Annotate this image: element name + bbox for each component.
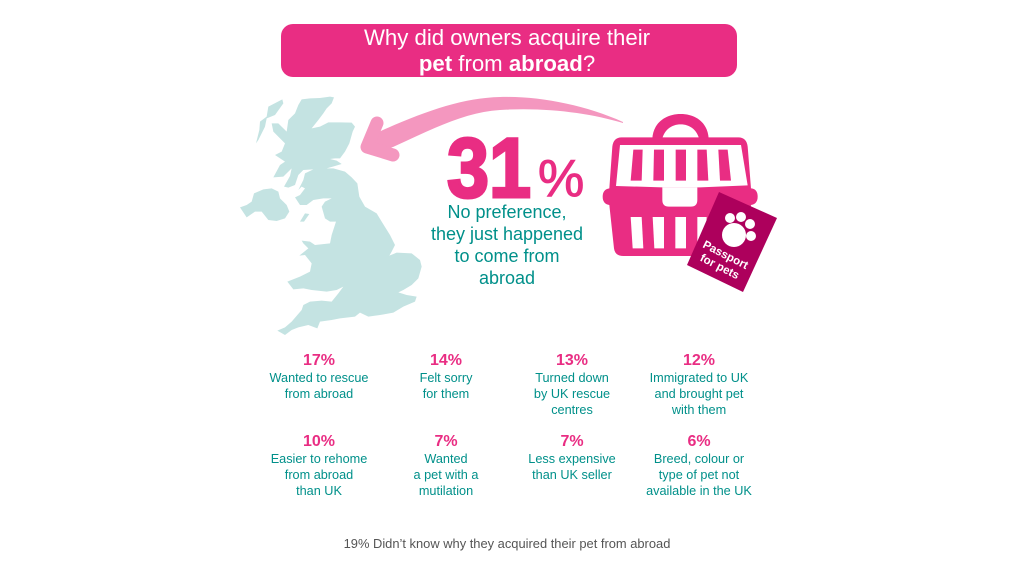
statistic: 14%: 14% — [430, 352, 462, 369]
main statement: No preference, — [447, 202, 567, 222]
statistic: 10%: than UK — [296, 484, 342, 498]
passport for pets — [687, 192, 777, 292]
big percentage 31%: 31 — [447, 121, 531, 215]
main statement — [431, 202, 583, 288]
statistic: 10%: Easier to rehome — [271, 452, 367, 466]
statistic: 7% wanted mutilation — [414, 433, 478, 498]
statistic: 6%: Breed, colour or — [654, 452, 744, 466]
statistic: 14%: for them — [423, 387, 469, 401]
statistic: 13% — [534, 352, 610, 417]
statistic: 10% — [271, 433, 367, 498]
statistic: 13%: Turned down — [535, 371, 609, 385]
statistic: 7% wanted mutilation: mutilation — [419, 484, 473, 498]
statistic: 7% wanted mutilation: Wanted — [424, 452, 468, 466]
statistic: 17%: from abroad — [285, 387, 353, 401]
statistic: 6%: 6% — [687, 433, 711, 450]
big percentage 31% — [447, 121, 584, 215]
main statement: they just happened — [431, 224, 583, 244]
statistic: 12%: 12% — [683, 352, 715, 369]
statistic: 14%: Felt sorry — [420, 371, 472, 385]
map of the UK — [240, 96, 422, 335]
statistic: 14% — [420, 352, 472, 401]
statistic: 13%: centres — [551, 403, 593, 417]
big percentage 31%: % — [538, 150, 584, 208]
statistic: 17% — [270, 352, 368, 401]
icon: paw print — [722, 212, 756, 247]
statistic: 6%: type of pet not — [659, 468, 739, 482]
title banner: pet from abroad? — [419, 51, 595, 76]
statistic: 10%: 10% — [303, 433, 335, 450]
statistic: 7% less expensive — [528, 433, 616, 482]
statistic: 12%: Immigrated to UK — [650, 371, 748, 385]
statistic: 17%: Wanted to rescue — [270, 371, 368, 385]
statistic: 17%: 17% — [303, 352, 335, 369]
statistic: 10%: from abroad — [285, 468, 353, 482]
statistic: 7% less expensive: than UK seller — [532, 468, 612, 482]
icon: pet carrier — [602, 114, 758, 256]
statistic: 7% less expensive: Less expensive — [528, 452, 616, 466]
passport label — [695, 239, 750, 284]
statistic: 13%: 13% — [556, 352, 588, 369]
statistic: 13%: by UK rescue — [534, 387, 610, 401]
statistic: 12%: and brought pet — [655, 387, 743, 401]
title banner: Why did owners acquire their — [364, 25, 650, 50]
passport cover — [687, 192, 777, 292]
footnote: 19% Didn’t know why they acquired their pet from abroad — [344, 536, 670, 551]
statistic: 7% wanted mutilation: a pet with a — [414, 468, 478, 482]
statistic: 12%: with them — [672, 403, 726, 417]
main statement: abroad — [479, 268, 535, 288]
statistic: 7% less expensive: 7% — [560, 433, 584, 450]
statistic: 7% wanted mutilation: 7% — [434, 433, 458, 450]
statistic: 6%: available in the UK — [646, 484, 752, 498]
statistic: 6% — [646, 433, 752, 498]
curved arrow to the UK — [360, 96, 623, 162]
statistic: 12% — [650, 352, 748, 417]
main statement: to come from — [454, 246, 560, 266]
passport label: for pets — [698, 252, 741, 282]
title banner — [281, 24, 737, 77]
passport label: Passport — [701, 239, 750, 272]
